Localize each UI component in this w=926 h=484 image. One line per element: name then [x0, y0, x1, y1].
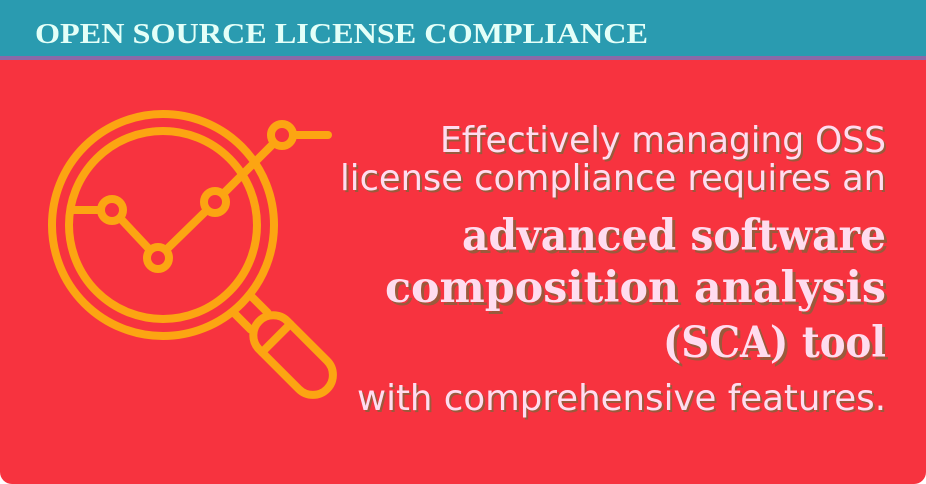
text block: statement: with comprehensive features. — [359, 380, 888, 421]
title: OPEN SOURCE LICENSE COMPLIANCE — [35, 19, 648, 50]
icon: magnifying glass with line chart — [52, 114, 341, 403]
text block: statement: license compliance requires an — [342, 160, 888, 201]
text block: statement — [340, 120, 889, 421]
text block: statement: license compliance requires an — [340, 158, 886, 199]
text block: statement: Effectively managing OSS — [442, 122, 888, 163]
text block: statement: composition analysis — [385, 263, 886, 313]
handle — [229, 291, 341, 403]
text block: statement: (SCA) tool — [663, 318, 886, 368]
chart line — [72, 206, 101, 214]
text block: statement: with comprehensive features. — [357, 378, 886, 419]
header bar — [0, 0, 926, 60]
text block: statement: advanced software — [462, 211, 886, 261]
text block: statement: (SCA) tool — [666, 321, 889, 371]
text block: statement: advanced software — [465, 214, 889, 264]
text block: statement: composition analysis — [388, 266, 889, 316]
text block: statement: Effectively managing OSS — [440, 120, 886, 161]
